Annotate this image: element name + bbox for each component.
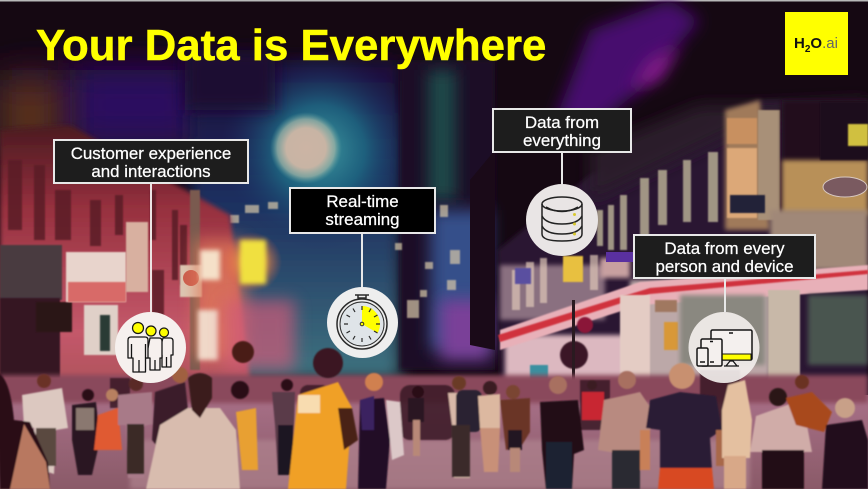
woman in black holding hands [540,376,584,489]
icon: database [526,184,598,256]
right side shop buildings [498,100,868,400]
left foreground person [0,372,50,489]
person dark shirt [152,367,188,450]
leader line: customer experience [150,184,152,316]
callout: customer experience [53,139,249,184]
sky and distant buildings [0,0,700,380]
person yellow-orange top [231,381,258,470]
person flowered top [72,389,100,475]
woman in cream dress [722,380,752,489]
woman in patterned top [500,385,530,472]
leader line: data from everything [561,153,563,187]
woman in tan top [478,381,500,472]
left side brick buildings [0,125,295,400]
callout: customer experience: and interactions [91,162,211,181]
callout: real-time streaming: streaming [325,210,400,229]
logo: H2O.ai [785,12,848,75]
white bottom strip [0,489,868,491]
icon: devices [688,312,760,383]
callout: every person and device: Data from every [664,239,785,258]
crowd of pedestrians [0,348,868,489]
man in pink shirt [598,371,652,489]
callout: real-time streaming [289,187,436,234]
logo: H2O.ai: O [810,35,822,52]
callout: every person and device: person and device [655,257,794,276]
person orange t-shirt [288,348,358,489]
woman on phone [822,398,868,489]
leader line: real-time streaming [361,233,363,288]
street surface [0,395,868,489]
man in rust shirt [786,375,832,432]
background crowd [110,370,740,440]
logo: H2O.ai: .ai [822,35,838,52]
leader line: every person and device [724,278,726,312]
logo: H2O.ai: 2 [805,44,811,55]
callout: customer experience: Customer experience [71,144,231,163]
icon: stopwatch [327,287,398,358]
callout: real-time streaming: Real-time [326,192,399,211]
woman with red hair [358,373,404,489]
callout: data from everything: Data from [525,113,599,132]
person red dress [94,389,122,450]
glowing street light [270,112,342,184]
person in grey [272,379,295,475]
man in navy t-shirt [640,363,726,489]
person with backpack [448,376,482,478]
person white shirt [22,374,68,474]
person beige shirt with ponytail [146,373,240,489]
callout: data from everything: everything [523,131,601,150]
icon: customer group [115,312,186,383]
distant woman with bag [408,386,424,456]
logo: H2O.ai: H [794,35,805,52]
person lilac shirt [118,377,152,478]
callout: every person and device [633,234,816,279]
man in pale shirt from behind [750,388,812,489]
callout: data from everything [492,108,632,153]
person in red shirt [582,380,604,420]
title: Your Data is Everywhere [36,21,546,70]
